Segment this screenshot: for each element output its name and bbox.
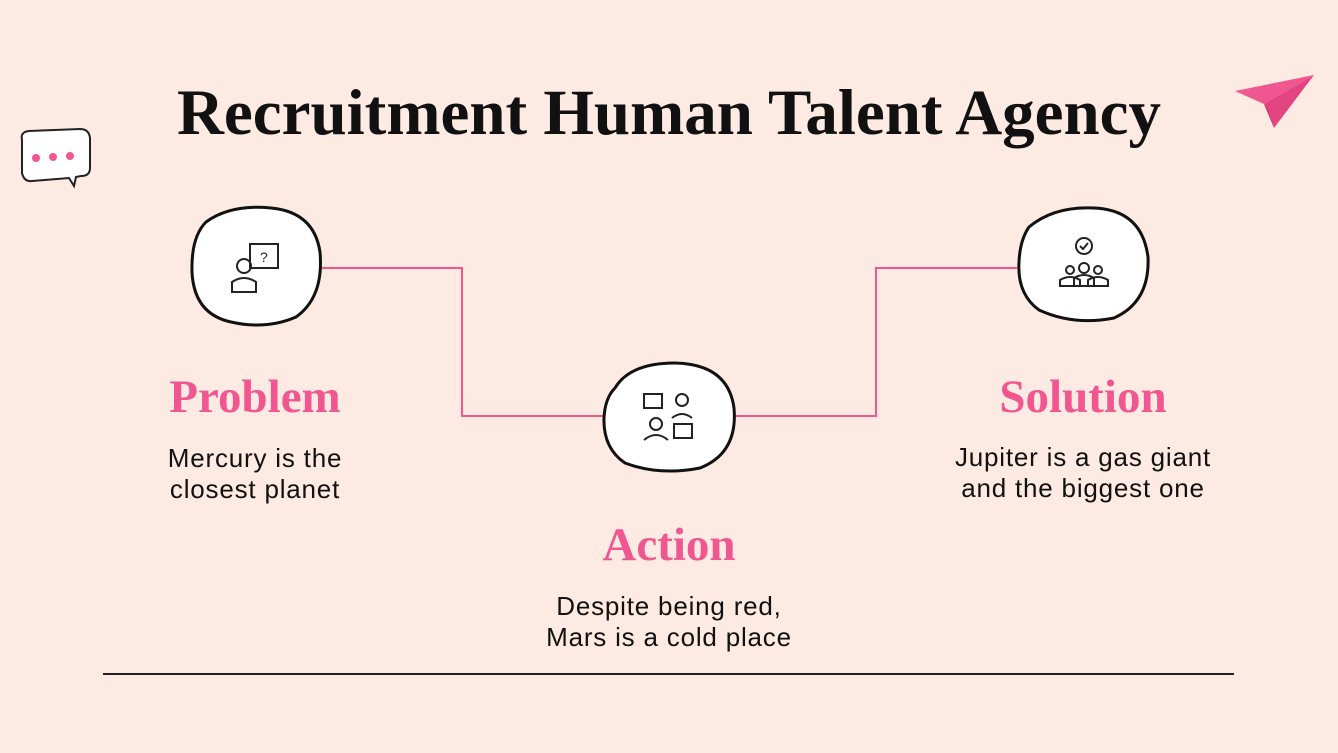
divider (103, 673, 1234, 675)
icon: chat bubble (20, 128, 91, 188)
icon blob: problem (190, 206, 322, 326)
text: problem: closest planet (170, 474, 340, 504)
text: action: Despite being red, (556, 591, 782, 621)
heading: problem: Problem (169, 371, 341, 423)
text: problem: Mercury is the (168, 443, 342, 473)
text: action (546, 591, 792, 652)
text: solution: and the biggest one (961, 473, 1205, 503)
heading: action: Action (602, 519, 736, 571)
icon blob: action (602, 362, 736, 472)
heading: solution: Solution (999, 371, 1167, 423)
text: solution (955, 442, 1211, 503)
icon blob: problem: ? (260, 249, 268, 265)
title: Recruitment Human Talent Agency (177, 77, 1161, 149)
icon blob: solution (1017, 206, 1150, 322)
text: solution: Jupiter is a gas giant (955, 442, 1211, 472)
text: problem (168, 443, 342, 504)
text: action: Mars is a cold place (546, 622, 792, 652)
icon: paper plane (1235, 75, 1314, 128)
